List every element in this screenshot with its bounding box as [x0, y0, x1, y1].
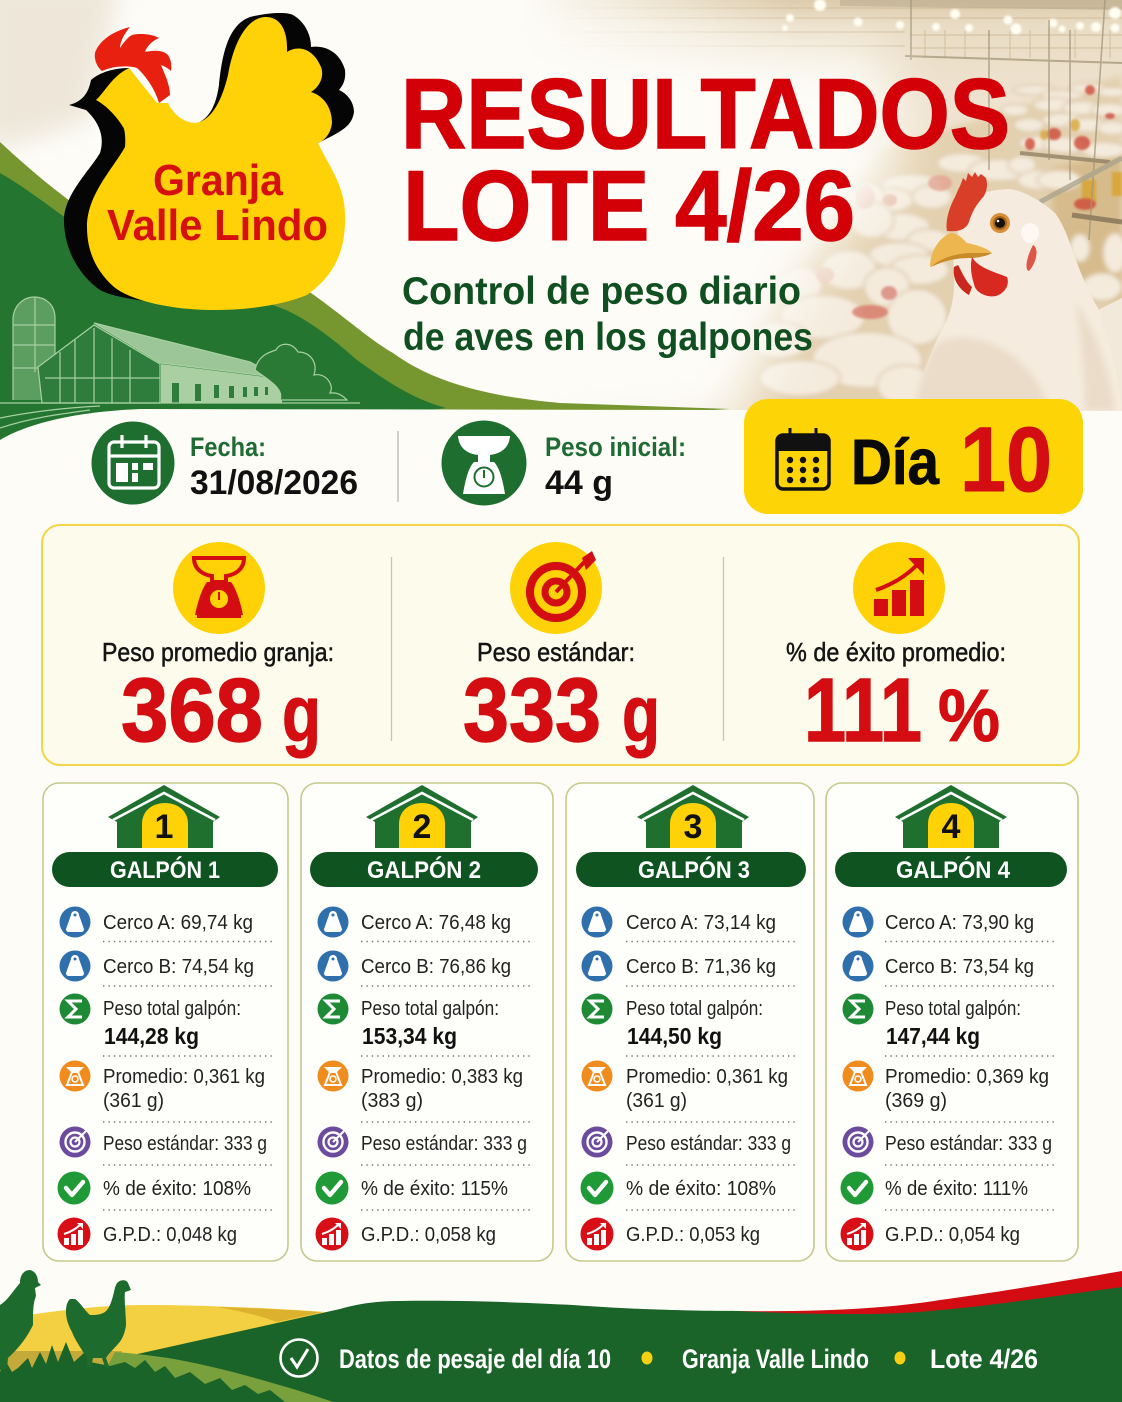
icon: house 3: 3 — [684, 808, 702, 846]
row: G.P.D.: G.P.D.: 0,054 kg — [885, 1224, 1020, 1246]
header pill: GALPÓN 2 — [367, 856, 481, 884]
panel: galpón 2 — [301, 783, 553, 1261]
metric: success rate: % — [938, 674, 1000, 757]
logo black shadow — [64, 13, 354, 302]
red ribbon — [730, 1271, 1122, 1320]
row: cerco B: Cerco B: 71,36 kg — [626, 956, 776, 978]
date text: Fecha: — [190, 432, 266, 462]
barn illustration — [0, 297, 360, 428]
row: peso estándar — [582, 1126, 791, 1158]
grass hill — [0, 1342, 285, 1402]
row: peso estándar — [318, 1126, 527, 1158]
row: cerco B — [582, 950, 776, 982]
row: promedio: (361 g) — [103, 1090, 164, 1112]
barn windows — [172, 383, 268, 403]
metric: success rate — [786, 542, 1006, 761]
row: promedio: (369 g) — [885, 1090, 947, 1112]
panel: galpón 1 — [43, 783, 288, 1261]
subtitle: Control de peso diario — [402, 270, 801, 313]
row: peso total — [318, 994, 499, 1049]
row: cerco B: Cerco B: 73,54 kg — [885, 956, 1034, 978]
metric: average weight: g — [282, 669, 321, 758]
row: G.P.D. — [316, 1218, 496, 1250]
row: peso estándar: Peso estándar: 333 g — [361, 1133, 527, 1155]
metric: average weight — [102, 542, 334, 761]
hen eye — [990, 213, 1010, 233]
row: peso total — [582, 994, 763, 1049]
row: promedio — [60, 1060, 265, 1112]
row: éxito: % de éxito: 115% — [361, 1178, 508, 1200]
icon: house 2 — [366, 785, 478, 848]
row: peso estándar: Peso estándar: 333 g — [626, 1133, 791, 1155]
metric: standard weight: 333 — [463, 661, 601, 761]
icon: growth chart — [853, 542, 945, 634]
olive hill band — [100, 1352, 333, 1402]
feeder lines and posts — [905, 0, 1122, 240]
panel: farm summary — [42, 525, 1079, 765]
header pill: GALPÓN 4 — [896, 856, 1011, 884]
row: peso total: 147,44 kg — [886, 1023, 980, 1049]
icon: red scale — [173, 542, 265, 634]
subtitle — [402, 270, 813, 359]
header background: poultry house photo — [0, 0, 1122, 412]
row: éxito — [840, 1172, 1028, 1204]
icon: scale — [442, 420, 526, 506]
row: G.P.D. — [840, 1218, 1020, 1250]
row: promedio — [582, 1060, 788, 1112]
header pill: GALPÓN 1 — [110, 856, 220, 884]
ceiling band — [840, 0, 1122, 10]
footer landscape — [0, 1270, 1122, 1402]
hen wattles — [954, 265, 972, 295]
metric: success rate: 111 — [804, 661, 922, 761]
icon: house 3 — [637, 785, 749, 848]
title: LOTE 4/26 — [403, 150, 855, 261]
row: promedio: (361 g) — [626, 1090, 687, 1112]
initial weight block: 44 g — [545, 464, 613, 502]
header pill — [835, 852, 1067, 887]
icon: house 1: 1 — [155, 808, 173, 846]
yellow hill — [0, 1305, 325, 1365]
row: cerco B: Cerco B: 74,54 kg — [103, 956, 254, 978]
row: cerco A — [318, 906, 511, 938]
row: promedio: (383 g) — [361, 1090, 423, 1112]
row: cerco B: Cerco B: 76,86 kg — [361, 956, 511, 978]
metric: standard weight: Peso estándar: — [477, 637, 635, 667]
icon: target — [510, 542, 602, 634]
lights — [782, 0, 1121, 34]
row: peso estándar: Peso estándar: 333 g — [885, 1133, 1052, 1155]
logo: Granja Valle Lindo hen — [64, 13, 354, 310]
footer message: Granja Valle Lindo — [682, 1344, 869, 1374]
date block — [92, 422, 358, 504]
white content area — [0, 409, 1122, 1402]
row: peso total: Peso total galpón: — [626, 998, 763, 1020]
row: peso total — [842, 994, 1021, 1049]
row: cerco A: Cerco A: 69,74 kg — [103, 912, 253, 934]
row: cerco A — [582, 906, 776, 938]
row: cerco A: Cerco A: 73,90 kg — [885, 912, 1034, 934]
row: peso estándar — [60, 1126, 267, 1158]
background chickens — [750, 83, 1122, 405]
row: éxito — [58, 1172, 251, 1204]
hen beak — [930, 233, 992, 267]
row: peso total: Peso total galpón: — [885, 998, 1021, 1020]
ground lines — [0, 403, 360, 428]
footer message: Datos de pesaje del día 10 — [339, 1344, 611, 1374]
initial weight block — [442, 420, 686, 506]
row: peso total: 144,50 kg — [627, 1023, 722, 1049]
row: promedio: Promedio: 0,383 kg — [361, 1066, 523, 1088]
day badge: 10 — [960, 409, 1052, 511]
logo yellow body — [87, 17, 345, 310]
hen silhouette — [66, 1280, 131, 1369]
silo — [13, 297, 55, 400]
logo name — [107, 156, 328, 250]
hen body shading — [915, 300, 1115, 411]
row: peso total — [60, 994, 241, 1049]
header pill: GALPÓN 3 — [638, 856, 750, 884]
metric: average weight: Peso promedio granja: — [102, 637, 334, 667]
metric: success rate: % de éxito promedio: — [786, 637, 1006, 667]
hen body — [915, 189, 1122, 411]
icon: calendar — [92, 422, 174, 504]
row: cerco B — [60, 950, 254, 982]
row: cerco A: Cerco A: 76,48 kg — [361, 912, 511, 934]
barn roof — [94, 323, 282, 378]
header pill — [310, 852, 538, 887]
icon: check circle — [280, 1340, 318, 1376]
initial weight text: Peso inicial: — [545, 432, 686, 462]
panel: galpón 3 — [566, 783, 814, 1261]
red combs and feeders — [816, 85, 1122, 319]
row: cerco B — [842, 950, 1034, 982]
date block: 31/08/2026 — [190, 464, 358, 502]
row: promedio: Promedio: 0,361 kg — [103, 1066, 265, 1088]
row: peso estándar: Peso estándar: 333 g — [103, 1133, 267, 1155]
barn front — [38, 325, 160, 403]
row: peso total: Peso total galpón: — [361, 998, 499, 1020]
title: RESULTADOS — [401, 58, 1010, 169]
logo name: Granja — [153, 156, 283, 205]
footer message: Lote 4/26 — [930, 1344, 1038, 1374]
icon: calendar — [777, 428, 829, 489]
icon: house 4 — [895, 785, 1007, 848]
metric: standard weight — [463, 542, 660, 761]
row: G.P.D.: G.P.D.: 0,053 kg — [626, 1224, 760, 1246]
header pill — [52, 852, 278, 887]
row: éxito: % de éxito: 111% — [885, 1178, 1028, 1200]
logo comb — [95, 27, 171, 103]
logo name: Valle Lindo — [107, 201, 328, 250]
main green wave — [133, 1287, 1122, 1402]
row: éxito: % de éxito: 108% — [626, 1178, 776, 1200]
panel: galpón 4 — [826, 783, 1078, 1261]
icon: house 4: 4 — [942, 808, 961, 846]
row: cerco A: Cerco A: 73,14 kg — [626, 912, 776, 934]
row: peso total: 144,28 kg — [104, 1023, 199, 1049]
row: éxito — [316, 1172, 508, 1204]
floor — [754, 75, 1122, 402]
row: éxito: % de éxito: 108% — [103, 1178, 251, 1200]
row: G.P.D.: G.P.D.: 0,048 kg — [103, 1224, 237, 1246]
row: G.P.D. — [580, 1218, 760, 1250]
footer message — [280, 1340, 1038, 1376]
header pill — [576, 852, 806, 887]
green hill — [0, 142, 730, 445]
row: peso total: Peso total galpón: — [103, 998, 241, 1020]
row: promedio — [842, 1060, 1049, 1112]
day badge: Día — [851, 426, 939, 498]
row: peso total: 153,34 kg — [362, 1023, 457, 1049]
rooster silhouette — [0, 1270, 41, 1370]
barn side — [161, 364, 282, 403]
row: promedio: Promedio: 0,361 kg — [626, 1066, 788, 1088]
icon: house 2: 2 — [413, 808, 431, 846]
row: éxito — [580, 1172, 776, 1204]
day badge — [744, 399, 1083, 514]
row: cerco B — [318, 950, 511, 982]
metric: average weight: 368 — [121, 661, 263, 761]
metric: standard weight: g — [622, 669, 660, 758]
hero hen — [915, 172, 1122, 411]
hen comb — [947, 172, 987, 231]
row: G.P.D. — [58, 1218, 237, 1250]
row: peso estándar — [842, 1126, 1052, 1158]
hen back feathers — [1090, 298, 1122, 411]
row: G.P.D.: G.P.D.: 0,058 kg — [361, 1224, 496, 1246]
subtitle: de aves en los galpones — [403, 316, 813, 359]
row: cerco A — [60, 906, 253, 938]
trees — [255, 344, 347, 400]
icon: house 1 — [108, 785, 220, 848]
row: cerco A — [842, 906, 1034, 938]
row: promedio: Promedio: 0,369 kg — [885, 1066, 1049, 1088]
row: promedio — [318, 1060, 523, 1112]
title — [401, 58, 1010, 261]
